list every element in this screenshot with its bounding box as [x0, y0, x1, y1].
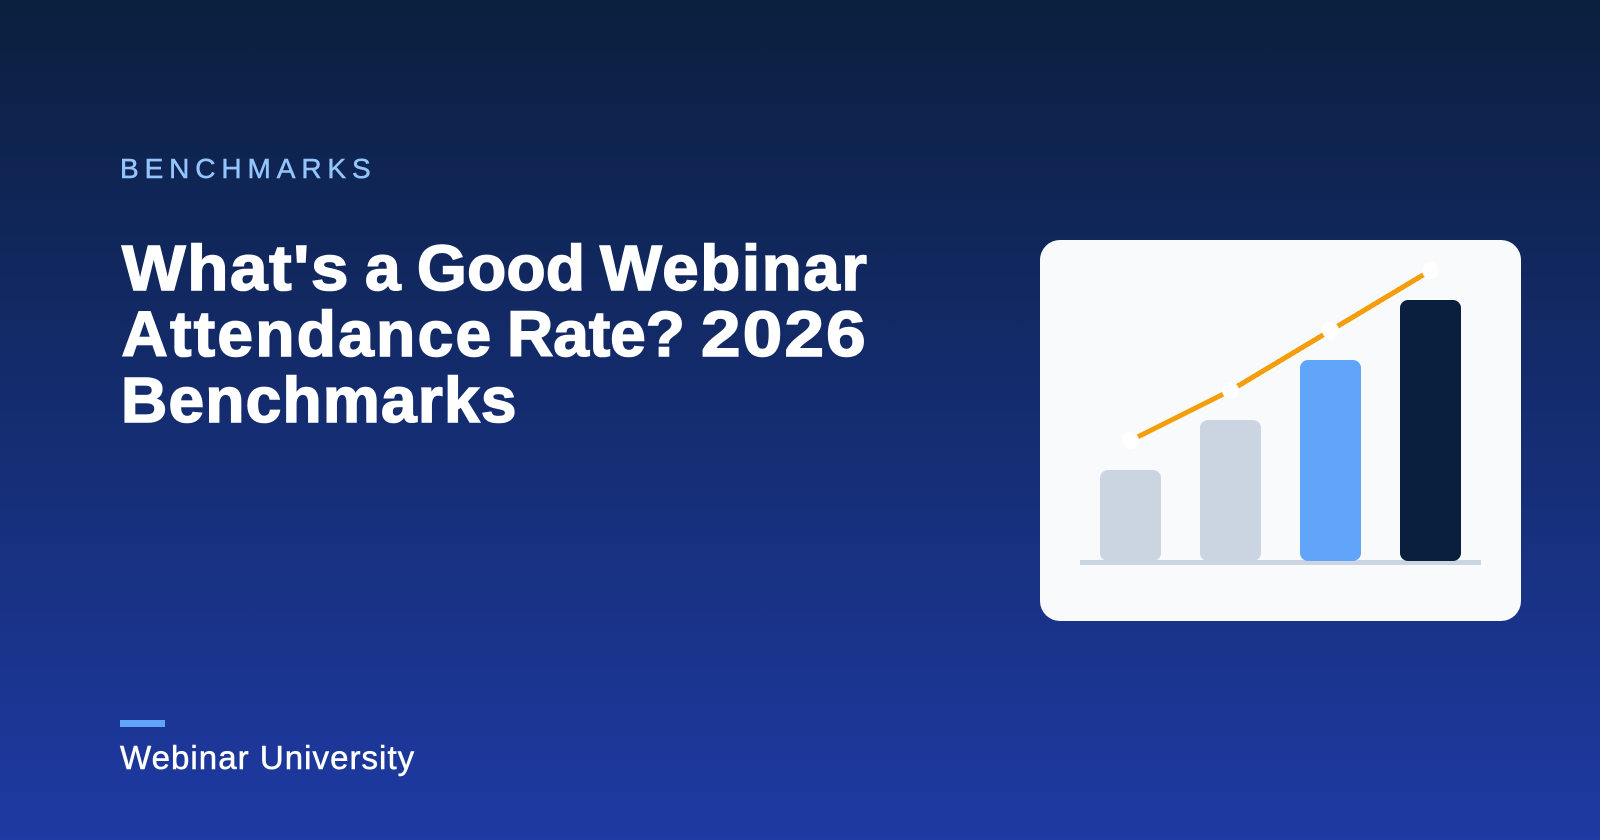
title: 2026	[701, 298, 868, 370]
title: Benchmarks	[121, 364, 518, 436]
bar 3	[1300, 360, 1361, 561]
title	[121, 232, 869, 436]
title: Webinar	[600, 232, 869, 304]
panel: card background	[1040, 240, 1521, 621]
chart illustration	[1040, 240, 1521, 621]
bar chart	[1100, 300, 1461, 561]
title: Attendance	[122, 298, 494, 370]
title: a	[365, 232, 402, 304]
bar 1	[1100, 470, 1161, 561]
trend line	[1130, 270, 1430, 440]
title: What's	[122, 232, 350, 304]
bar 4	[1400, 300, 1461, 561]
chart baseline	[1080, 560, 1481, 565]
title: Rate?	[507, 298, 685, 370]
brand name: Webinar University	[120, 739, 415, 776]
eyebrow label: BENCHMARKS	[120, 153, 377, 184]
bar 2	[1200, 420, 1261, 561]
trend points	[1122, 262, 1439, 449]
title: Good	[417, 232, 585, 304]
accent bar	[120, 720, 165, 727]
